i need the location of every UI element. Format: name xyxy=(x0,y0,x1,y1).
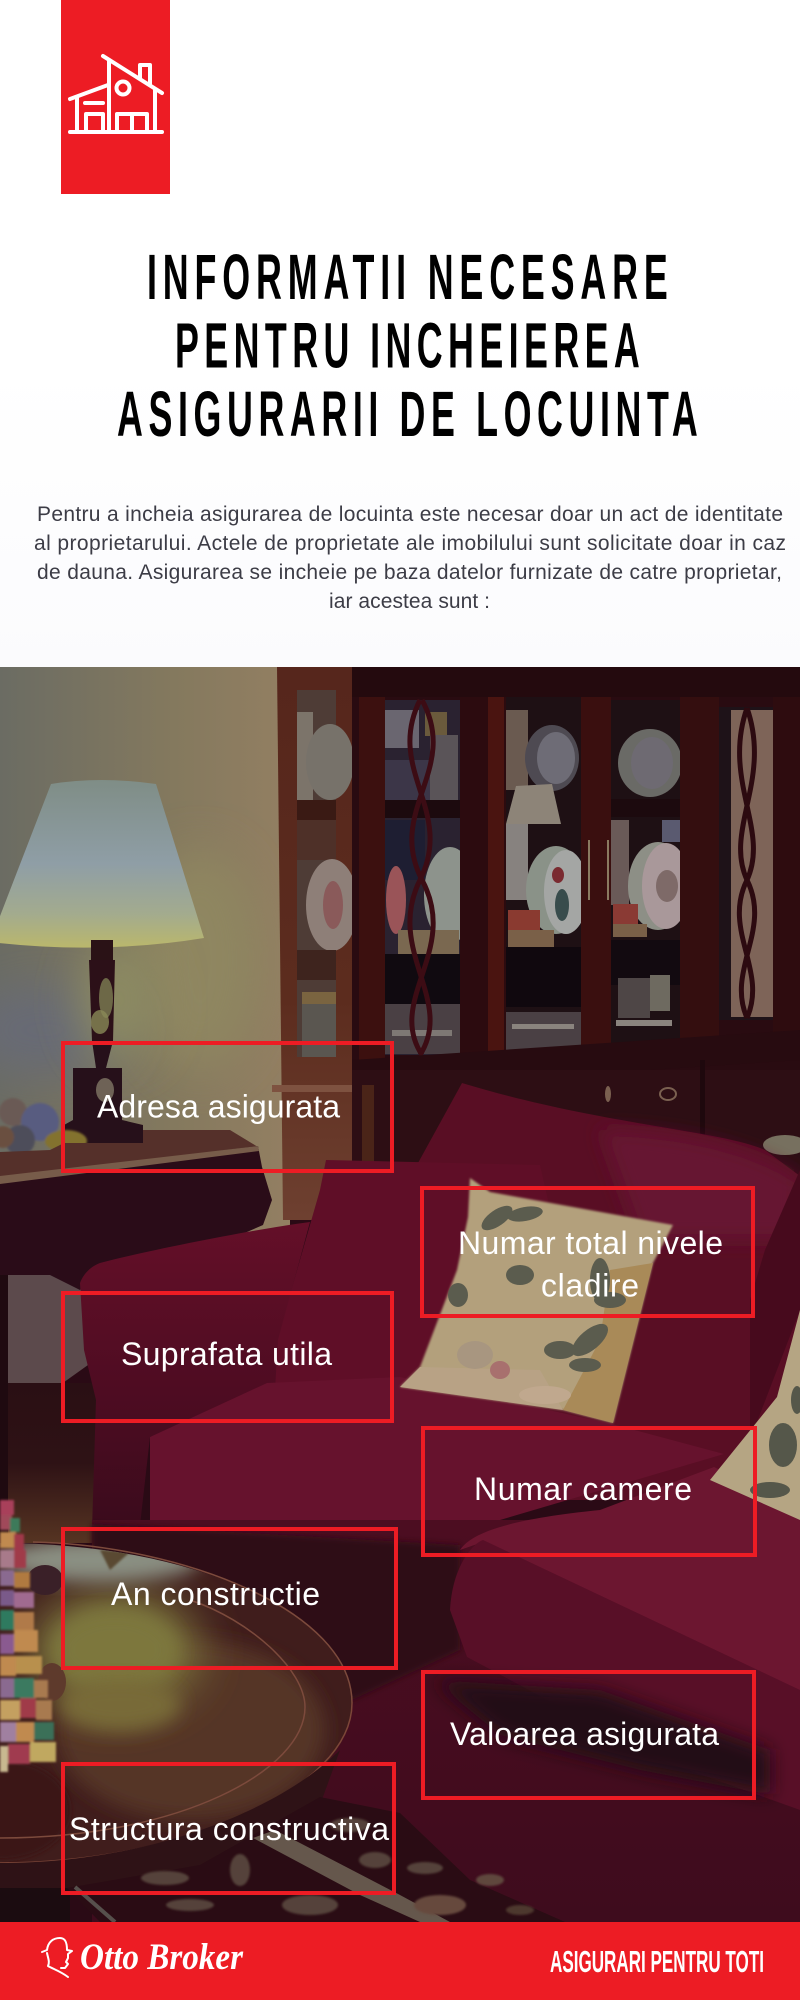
footer bar xyxy=(0,1922,800,2000)
box: Adresa asigurata: Adresa asigurata xyxy=(97,1088,340,1124)
intro paragraph: al proprietarului. Actele de proprietate ale imobilului sunt solicitate doar in caz xyxy=(34,532,786,555)
intro paragraph: de dauna. Asigurarea se incheie pe baza datelor furnizate de catre proprietar, xyxy=(37,561,782,584)
sofa left cushion xyxy=(276,1160,418,1383)
sofa dark recess under seat xyxy=(92,1524,460,1700)
table underside xyxy=(0,1750,340,1890)
sofa dark shadow band xyxy=(433,1680,770,1795)
box: Suprafata utila xyxy=(63,1293,392,1421)
lattice of door A xyxy=(410,700,433,1055)
box: Suprafata utila: Suprafata utila xyxy=(121,1336,332,1372)
sofa lower front xyxy=(92,1520,800,1922)
box: An constructie: An constructie xyxy=(111,1576,320,1612)
page background xyxy=(0,0,800,667)
cabinet glass door C xyxy=(611,700,680,1042)
cabinet frames xyxy=(359,697,719,1060)
cabinet glass door A xyxy=(385,700,460,1055)
floral pillow xyxy=(400,1178,673,1423)
left lower wall and floor xyxy=(0,1275,94,1543)
title xyxy=(117,241,698,450)
box: Numar total nivele cladire: Numar total nivele xyxy=(458,1225,723,1261)
rug xyxy=(67,1797,565,1922)
cabinet side panel xyxy=(272,667,352,1220)
round table xyxy=(0,1538,352,1863)
box: Structura constructiva xyxy=(63,1764,394,1893)
box: Valoarea asigurata: Valoarea asigurata xyxy=(450,1716,719,1752)
title: ASIGURARII DE LOCUINTA xyxy=(117,378,698,450)
sofa back xyxy=(400,1083,800,1500)
intro paragraph: Pentru a incheia asigurarea de locuinta este necesar doar un act de identitate xyxy=(37,503,783,526)
box: Valoarea asigurata xyxy=(423,1672,754,1798)
box: Numar total nivele cladire xyxy=(422,1188,753,1316)
box: Structura constructiva: Structura constructiva xyxy=(69,1811,389,1847)
box: Numar camere xyxy=(423,1428,755,1555)
candy tree xyxy=(0,1500,56,1772)
icon: house xyxy=(70,56,162,132)
side table xyxy=(0,1130,272,1300)
box: An constructie xyxy=(63,1529,396,1668)
box: Adresa asigurata xyxy=(63,1043,392,1171)
cabinet body xyxy=(352,747,358,934)
sofa arm xyxy=(80,1222,310,1530)
red banner with house icon xyxy=(61,0,170,194)
photo: living room with dark overlay xyxy=(0,667,800,1922)
intro paragraph: iar acestea sunt : xyxy=(329,590,490,613)
sofa seat right front xyxy=(450,1540,800,1810)
wall xyxy=(0,667,290,1307)
icon: Otto Broker head logo xyxy=(42,1938,72,1977)
cabinet lower drawers xyxy=(362,1060,800,1161)
cabinet glass door D with lattice xyxy=(719,707,773,1020)
right pillow xyxy=(710,1310,800,1520)
lamp stand xyxy=(64,940,143,1143)
sofa seat right xyxy=(460,1467,800,1692)
box: Numar total nivele cladire: cladire xyxy=(541,1268,639,1304)
glass globes xyxy=(0,1098,87,1155)
cabinet glass door B xyxy=(506,697,588,1050)
logo wordmark: Otto Broker xyxy=(80,1937,244,1978)
title: PENTRU INCHEIEREA xyxy=(175,310,640,381)
box: Numar camere: Numar camere xyxy=(474,1471,692,1507)
title: INFORMATII NECESARE xyxy=(147,241,668,313)
baskets xyxy=(27,1565,66,1701)
intro paragraph xyxy=(34,503,786,613)
sofa seat left xyxy=(150,1382,723,1520)
lamp shade xyxy=(0,780,204,948)
